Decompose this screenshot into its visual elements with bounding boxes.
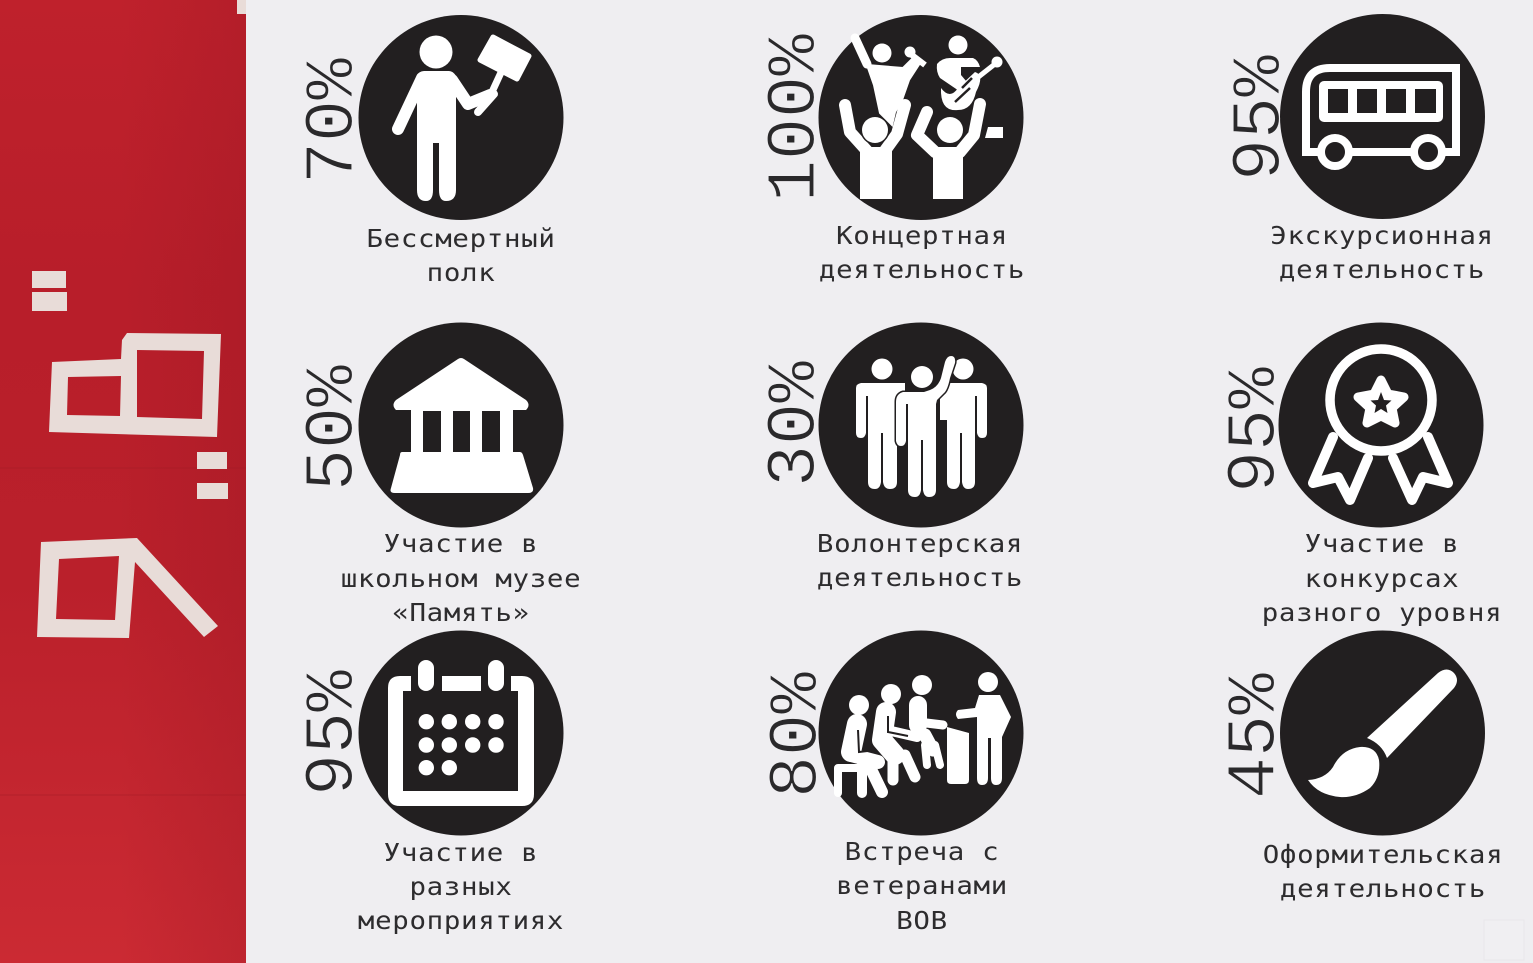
icon: bus (1306, 68, 1456, 166)
icon: calendar (388, 660, 534, 806)
percent: 95% (1217, 366, 1296, 493)
item: Участие в разных мероприятиях (295, 630, 564, 936)
percent: 100% (757, 33, 836, 202)
percent: 80% (759, 671, 838, 798)
percent: 70% (295, 57, 374, 184)
label: Участие в (1305, 530, 1459, 559)
icon: seated audience and speaker (838, 672, 1011, 793)
icon: volunteers group (856, 356, 987, 497)
label: мероприятиях (358, 907, 564, 936)
label: Экскурсионная (1270, 222, 1494, 251)
label: Участие в (384, 839, 538, 868)
item: Экскурсионная деятельность (1222, 14, 1494, 285)
percent: 95% (295, 669, 374, 796)
percent: 50% (295, 364, 374, 491)
label: «Память» (392, 599, 530, 628)
label: деятельность (1279, 256, 1485, 285)
label: Бессмертный (366, 225, 556, 254)
watermark box (1484, 920, 1524, 960)
label: деятельность (819, 256, 1025, 285)
percent: 95% (1222, 54, 1301, 181)
label: Участие в (384, 530, 538, 559)
label: деятельность (817, 564, 1023, 593)
label: Волонтерская (817, 530, 1023, 559)
item: Оформительская деятельность (1217, 630, 1503, 904)
icon: concert performers and audience (845, 36, 1003, 199)
icon: museum building (390, 358, 533, 493)
icon: award rosette (1313, 349, 1448, 500)
label: ветеранами (836, 872, 1008, 901)
percent: 30% (757, 360, 836, 487)
label: разных (409, 873, 513, 902)
item: Бессмертный полк (295, 15, 564, 288)
item: Встреча с ветеранами ВОВ (759, 630, 1024, 936)
label: полк (427, 259, 495, 288)
label: деятельность (1280, 875, 1486, 904)
icon: paint brush (1308, 670, 1457, 797)
label: разного уровня (1262, 599, 1502, 628)
item: Концертная деятельность (757, 15, 1025, 285)
panel: red banner with sewn date (0, 0, 246, 963)
label: Оформительская (1263, 841, 1503, 870)
label: ВОВ (896, 907, 948, 936)
item: Участие в конкурсах (1217, 322, 1502, 628)
label: Концертная (836, 222, 1008, 251)
label: Встреча с (845, 838, 999, 867)
percent: 45% (1217, 672, 1296, 799)
ribbon date glyphs (32, 271, 228, 638)
label: конкурсах (1305, 565, 1459, 594)
item: Волонтерская деятельность (757, 322, 1024, 593)
icon: person with placard (398, 36, 529, 201)
label: школьном музее (341, 565, 581, 594)
item: Участие в школьном музее (295, 322, 581, 628)
